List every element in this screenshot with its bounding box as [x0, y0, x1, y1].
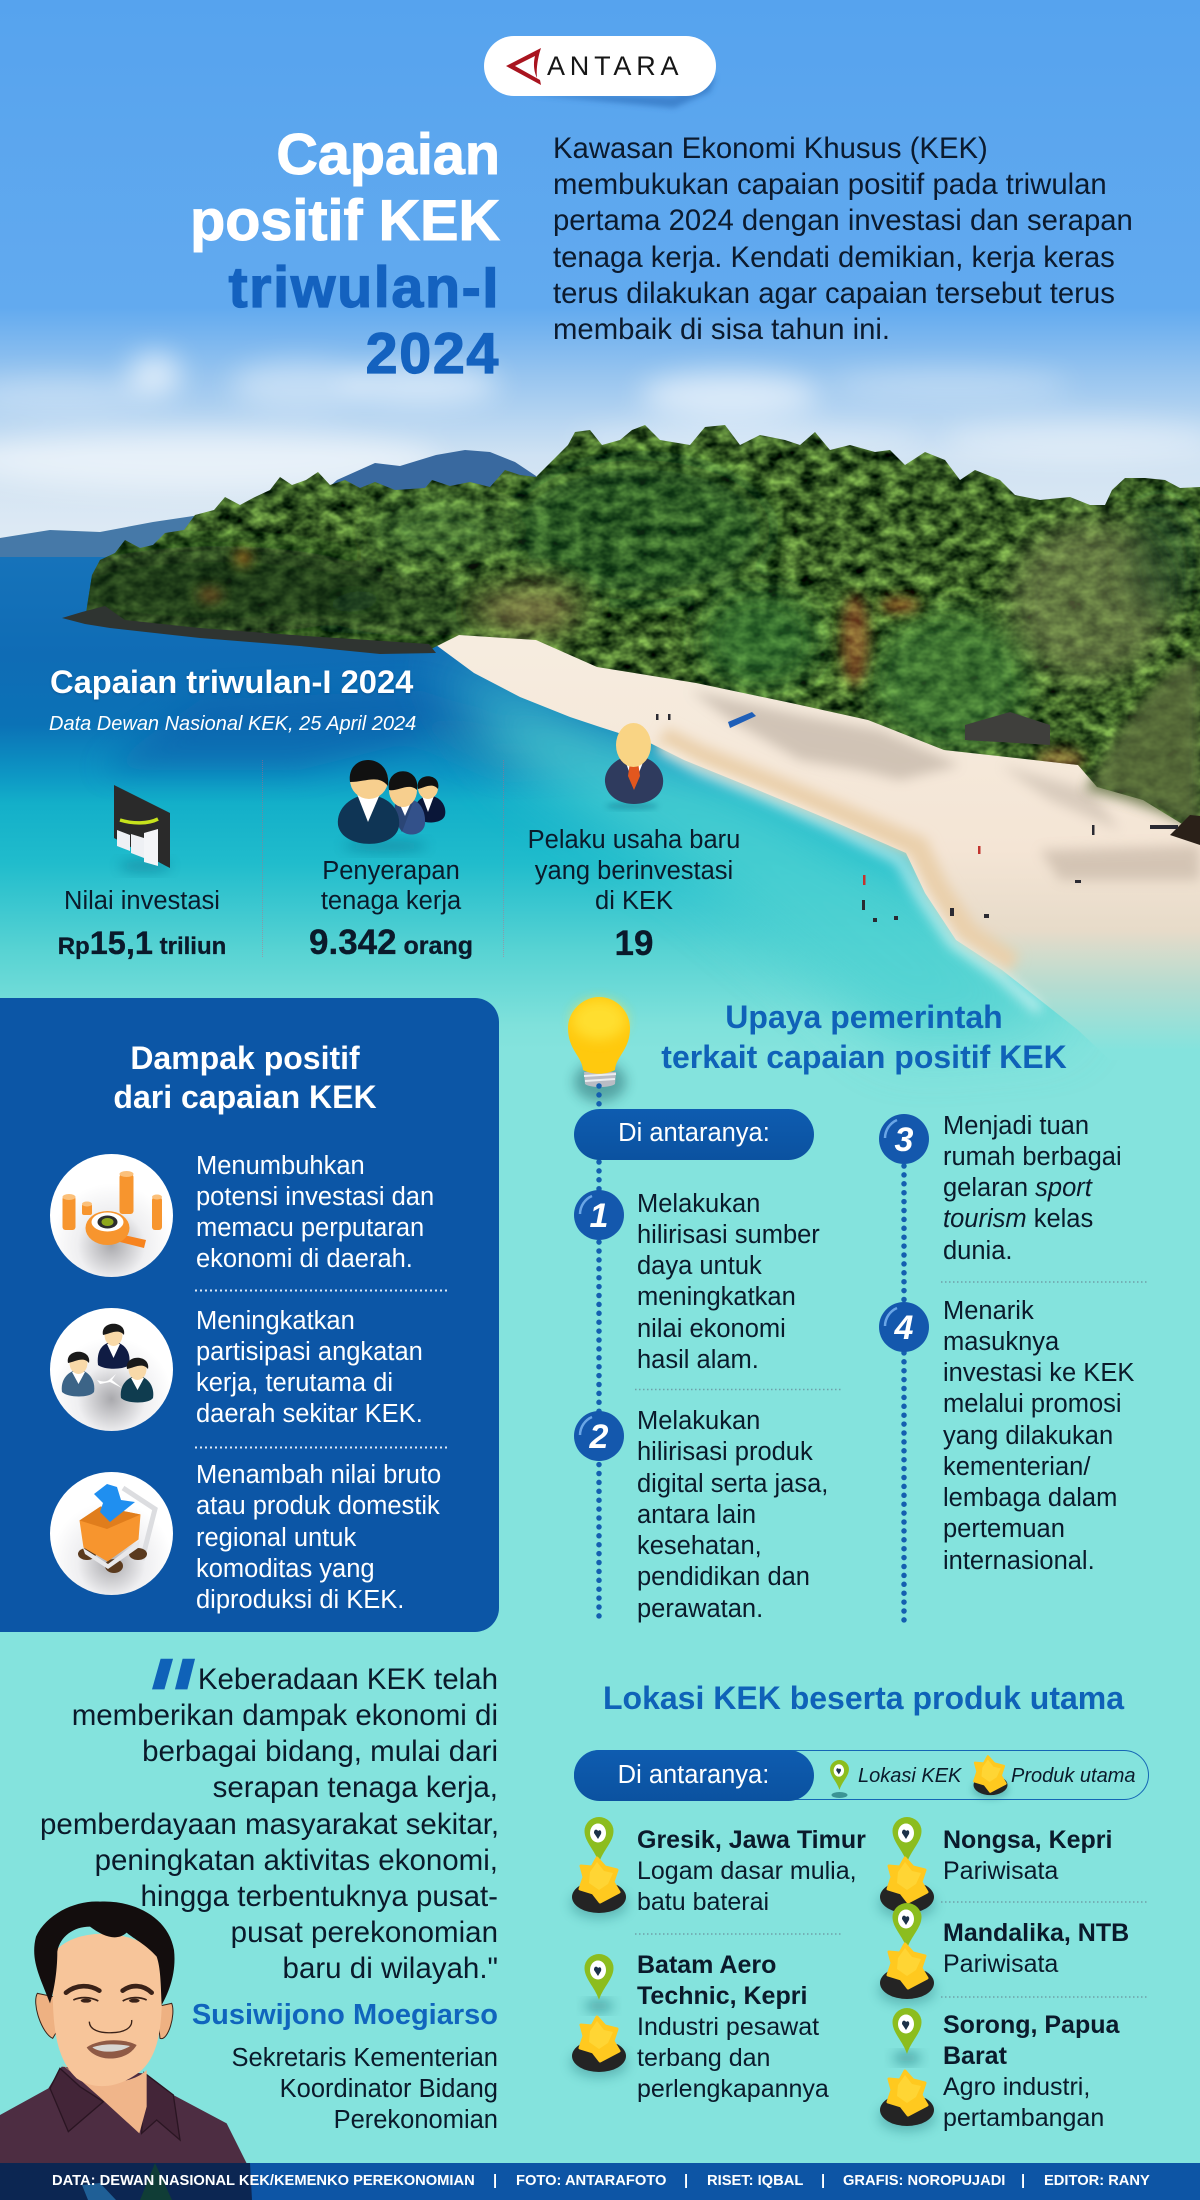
- icon: investment target: [50, 1154, 173, 1277]
- benefit text: Menumbuhkan: [196, 1152, 365, 1180]
- data source note: Data Dewan Nasional KEK, 25 April 2024: [49, 713, 416, 735]
- legend outline: [574, 1750, 1148, 1800]
- pill: di antaranya: [574, 1109, 814, 1160]
- logo wordmark: ANTARA: [547, 51, 683, 81]
- location text: terbang dan: [637, 2044, 770, 2072]
- icon: workforce group: [50, 1308, 173, 1431]
- panel heading: [113, 1040, 377, 1115]
- icon: shopping cart: [50, 1472, 173, 1595]
- step text: [637, 1190, 820, 1374]
- step text: pertemuan: [943, 1515, 1065, 1543]
- pill shadow: [549, 77, 716, 110]
- step text: investasi ke KEK: [943, 1359, 1134, 1387]
- step text: yang dilakukan: [943, 1422, 1113, 1450]
- quote mark: [152, 1658, 196, 1691]
- step text: hasil alam.: [637, 1346, 759, 1374]
- step text: Melakukan: [637, 1407, 760, 1435]
- step text: Menjadi tuan: [943, 1112, 1089, 1140]
- quote text: berbagai bidang, mulai dari: [142, 1735, 498, 1768]
- location text: Nongsa, Kepri: [943, 1826, 1112, 1854]
- location text: Barat: [943, 2042, 1007, 2070]
- location text: Mandalika, NTB: [943, 1919, 1129, 1947]
- benefit text: kerja, terutama di: [196, 1369, 393, 1397]
- quote text: hingga terbentuknya pusat-: [140, 1880, 498, 1913]
- quote text: baru di wilayah.": [283, 1952, 498, 1985]
- location text: batu baterai: [637, 1888, 769, 1916]
- section: upaya pemerintah: [564, 992, 1146, 2126]
- logo mark: [506, 48, 541, 85]
- step text: melalui promosi: [943, 1390, 1122, 1418]
- quote block: [40, 1655, 500, 1985]
- step text: [943, 1112, 1122, 1264]
- badge 2: 2: [589, 1418, 609, 1456]
- location text: perlengkapannya: [637, 2075, 829, 2103]
- value: 19: [615, 924, 653, 963]
- benefit text: potensi investasi dan: [196, 1183, 434, 1211]
- intro paragraph: pertama 2024 dengan investasi dan serapan: [553, 204, 1133, 237]
- badge 3: 3: [895, 1121, 914, 1159]
- timeline dots: [596, 1083, 907, 1623]
- step text: lembaga dalam: [943, 1484, 1117, 1512]
- credit: data: DATA: DEWAN NASIONAL KEK/KEMENKO PEREKONOMIAN: [52, 2173, 475, 2189]
- separator: |: [1021, 2173, 1025, 2189]
- step text: kesehatan,: [637, 1532, 762, 1560]
- value: 9.342 orang: [309, 923, 473, 962]
- quote text: [40, 1662, 498, 1988]
- quote text: pemberdayaan masyarakat sekitar,: [40, 1808, 499, 1840]
- label: yang berinvestasi: [535, 856, 733, 884]
- step 1: [574, 1190, 820, 1374]
- location text: pertambangan: [943, 2104, 1104, 2132]
- benefit text: ekonomi di daerah.: [196, 1245, 413, 1273]
- benefit text: komoditas yang: [196, 1555, 375, 1583]
- step text: gelaran sport: [943, 1174, 1092, 1202]
- location text: [943, 2010, 1119, 2135]
- location text: Industri pesawat: [637, 2013, 819, 2041]
- stat divider 1: [262, 760, 263, 957]
- pill: di antaranya: Di antaranya:: [618, 1119, 770, 1147]
- label: Penyerapan: [322, 857, 460, 885]
- location: Mandalika: [877, 1904, 1147, 1989]
- benefit text: daerah sekitar KEK.: [196, 1400, 423, 1428]
- step 3: [879, 1112, 1122, 1264]
- section heading: capaian triwulan: Capaian triwulan-I 2024: [50, 663, 413, 700]
- stat: penyerapan tenaga kerja: [309, 760, 473, 962]
- label: Pelaku usaha baru: [528, 826, 740, 854]
- portrait: Susiwijono Moegiarso: [0, 1880, 260, 2200]
- benefit text: regional untuk: [196, 1524, 356, 1552]
- location marker: [570, 1815, 630, 1915]
- badge 4: 4: [894, 1309, 914, 1347]
- credit: editor: EDITOR: RANY: [1044, 2173, 1150, 2189]
- step text: tourism kelas: [943, 1205, 1093, 1233]
- section: lokasi KEK: [570, 1675, 1160, 2155]
- benefit text: Menambah nilai bruto: [196, 1461, 441, 1489]
- step text: Melakukan: [637, 1190, 760, 1218]
- step text: daya untuk: [637, 1252, 762, 1280]
- step text: internasional.: [943, 1546, 1095, 1574]
- location text: Logam dasar mulia,: [637, 1857, 857, 1885]
- step text: [637, 1407, 828, 1622]
- portrait overlap on bar: [0, 2163, 254, 2200]
- step text: nilai ekonomi: [637, 1314, 786, 1342]
- title: [190, 123, 500, 386]
- intro paragraph: membaik di sisa tahun ini.: [553, 313, 890, 346]
- panel heading: Dampak positif: [130, 1040, 360, 1076]
- step text: perawatan.: [637, 1594, 763, 1622]
- location: Nongsa: [877, 1815, 1147, 1900]
- location text: Gresik, Jawa Timur: [637, 1826, 866, 1854]
- panel heading: dari capaian KEK: [113, 1079, 377, 1115]
- step text: digital serta jasa,: [637, 1470, 828, 1498]
- credit: grafis: GRAFIS: NOROPUJADI: [843, 2173, 1005, 2189]
- benefit text: memacu perputaran: [196, 1214, 424, 1242]
- intro paragraph: membukukan capaian positif pada triwulan: [553, 168, 1107, 201]
- badge 3: [879, 1114, 929, 1164]
- step text: hilirisasi produk: [637, 1438, 813, 1466]
- location: Batam: [570, 1950, 850, 2110]
- credit: foto: FOTO: ANTARAFOTO: [516, 2173, 666, 2189]
- benefit text: [196, 1461, 441, 1614]
- badge 4: [879, 1302, 929, 1352]
- separator: |: [821, 2173, 825, 2189]
- step 4: [879, 1296, 1134, 1574]
- badge 1: [574, 1190, 624, 1240]
- legend: lokasi KEK: Lokasi KEK: [858, 1765, 961, 1787]
- location marker: [877, 1904, 937, 2004]
- quote text: memberikan dampak ekonomi di: [72, 1699, 498, 1732]
- step text: rumah berbagai: [943, 1143, 1122, 1171]
- heading: terkait capaian positif KEK: [661, 1039, 1067, 1075]
- step text: Menarik: [943, 1296, 1034, 1324]
- intro paragraph: Kawasan Ekonomi Khusus (KEK): [553, 132, 988, 165]
- location text: [943, 1918, 1129, 1980]
- label: di KEK: [595, 887, 673, 915]
- location text: Pariwisata: [943, 1857, 1058, 1885]
- credit: riset: RISET: IQBAL: [707, 2173, 803, 2189]
- legend bar: [574, 1750, 1150, 1800]
- location text: Agro industri,: [943, 2073, 1090, 2101]
- stat: pelaku usaha baru: [528, 723, 740, 963]
- benefit 3: [50, 1461, 441, 1614]
- location: Sorong: [877, 2008, 1147, 2138]
- separator: |: [493, 2173, 497, 2189]
- location text: Pariwisata: [943, 1950, 1058, 1978]
- intro paragraph: tenaga kerja. Kendati demikian, kerja keras: [553, 241, 1115, 274]
- location text: Batam Aero: [637, 1951, 776, 1979]
- location text: [637, 1950, 829, 2105]
- icon: light bulb: [564, 992, 634, 1108]
- step text: dunia.: [943, 1236, 1012, 1264]
- quote text: serapan tenaga kerja,: [213, 1771, 498, 1804]
- benefit 1: [50, 1152, 434, 1277]
- role: Sekretaris Kementerian: [232, 2044, 498, 2072]
- benefit text: atau produk domestik: [196, 1492, 440, 1520]
- legend pill: Di antaranya:: [618, 1761, 769, 1789]
- icon: chart box: [114, 785, 170, 877]
- location: Gresik: [570, 1815, 850, 1915]
- stat divider 2: [503, 760, 504, 957]
- title: triwulan-I: [228, 256, 500, 320]
- legend icons: [574, 1750, 1150, 1800]
- location text: Sorong, Papua: [943, 2011, 1119, 2039]
- heading: Lokasi KEK beserta produk utama: [603, 1680, 1124, 1716]
- step text: pendidikan dan: [637, 1563, 810, 1591]
- step text: kementerian/: [943, 1453, 1090, 1481]
- location text: [943, 1825, 1112, 1887]
- panel: dampak positif: [0, 998, 499, 1632]
- value: Rp15,1 triliun: [58, 925, 226, 961]
- quote text: peningkatan aktivitas ekonomi,: [95, 1844, 498, 1877]
- icon: group of workers: [338, 760, 446, 856]
- benefit text: [196, 1306, 423, 1428]
- name: Susiwijono Moegiarso: [192, 1999, 498, 2031]
- step text: hilirisasi sumber: [637, 1221, 820, 1249]
- role: [180, 2043, 498, 2136]
- label: [528, 826, 740, 915]
- location text: [637, 1825, 866, 1919]
- benefit text: [196, 1152, 434, 1273]
- step text: meningkatkan: [637, 1283, 796, 1311]
- benefit 2: [50, 1306, 423, 1431]
- label: Nilai investasi: [64, 887, 220, 915]
- background photo: sky, sea, forest and beach: [0, 0, 1200, 1070]
- badge 2: [574, 1411, 624, 1461]
- benefit text: diproduksi di KEK.: [196, 1586, 404, 1614]
- title: Capaian: [276, 123, 500, 187]
- role: Koordinator Bidang: [280, 2075, 498, 2103]
- footer credits bar: [0, 2163, 1200, 2200]
- step 2: [574, 1407, 828, 1622]
- label: tenaga kerja: [321, 887, 461, 915]
- attribution: [180, 1998, 500, 2148]
- quote text: pusat perekonomian: [231, 1916, 498, 1949]
- legend: produk utama: Produk utama: [1011, 1765, 1136, 1787]
- separator: |: [684, 2173, 688, 2189]
- benefit text: Meningkatkan: [196, 1306, 355, 1334]
- intro paragraph: terus dilakukan agar capaian tersebut terus: [553, 277, 1115, 310]
- heading: Upaya pemerintah: [725, 999, 1003, 1035]
- badge 1: 1: [590, 1197, 608, 1235]
- location marker: [877, 1815, 937, 1915]
- quote text: Keberadaan KEK telah: [198, 1663, 498, 1696]
- heading: [661, 999, 1067, 1075]
- title: 2024: [366, 322, 500, 386]
- icon: businessman: [604, 723, 664, 812]
- benefit text: partisipasi angkatan: [196, 1338, 423, 1366]
- step text: [943, 1296, 1134, 1577]
- role: Perekonomian: [334, 2106, 498, 2134]
- location text: Technic, Kepri: [637, 1982, 807, 2010]
- legend pill: [574, 1750, 814, 1801]
- white pill: [484, 36, 716, 96]
- intro paragraph: [553, 132, 1133, 346]
- step text: antara lain: [637, 1501, 756, 1529]
- location marker: [877, 2008, 937, 2133]
- location marker: [570, 1950, 630, 2080]
- label: [321, 857, 462, 915]
- logo: ANTARA pill: [484, 36, 716, 110]
- title: positif KEK: [190, 189, 500, 253]
- stat: nilai investasi: [58, 758, 664, 961]
- step text: masuknya: [943, 1328, 1059, 1356]
